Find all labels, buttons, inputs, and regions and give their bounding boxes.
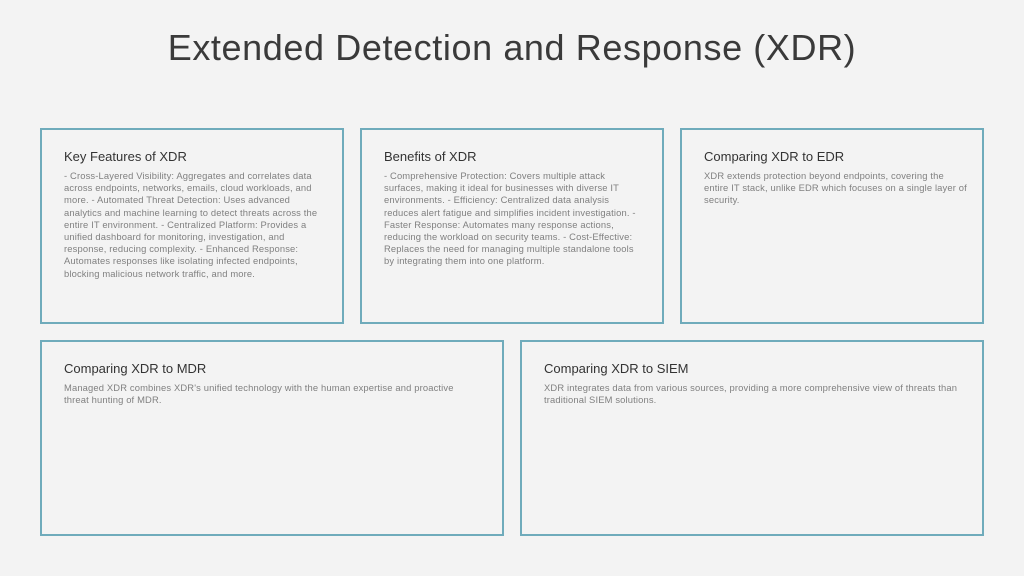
panel: XDR vs EDR: Comparing XDR to EDR <box>704 149 844 164</box>
panel: key features: - Cross-Layered Visibility: Aggregates and correlates data <box>64 170 312 181</box>
panel: benefits: reducing the workload on security teams. - Cost-Effective: <box>384 231 632 242</box>
panel: XDR vs SIEM: traditional SIEM solutions. <box>544 394 656 405</box>
panel: key features: more. - Automated Threat Detection: Uses advanced <box>64 194 290 205</box>
panel: benefits: Benefits of XDR <box>384 149 476 164</box>
panel: benefits: - Comprehensive Protection: Covers multiple attack <box>384 170 605 181</box>
panel: XDR vs MDR: threat hunting of MDR. <box>64 394 162 405</box>
panel: key features: response, reducing complexity. - Enhanced Response: <box>64 243 298 254</box>
panel: XDR vs SIEM <box>520 340 984 536</box>
panel: XDR vs EDR: XDR extends protection beyond endpoints, covering the <box>704 170 944 181</box>
panel: benefits: Faster Response: Automates many response actions, <box>384 219 614 230</box>
panel: XDR vs SIEM: XDR integrates data from various sources, providing a more comprehensive view of threats than <box>544 382 957 393</box>
panel: XDR vs SIEM: Comparing XDR to SIEM <box>544 361 688 376</box>
panel: XDR vs EDR <box>680 128 984 324</box>
panel: key features: across endpoints, networks, emails, cloud workloads, and <box>64 182 312 193</box>
panel: XDR vs MDR: Managed XDR combines XDR's unified technology with the human expertise and proactive <box>64 382 454 393</box>
panel: key features <box>40 128 344 324</box>
panel: benefits: Replaces the need for managing multiple standalone tools <box>384 243 634 254</box>
panel: benefits: by integrating them into one platform. <box>384 255 544 266</box>
panel: benefits: surfaces, making it ideal for businesses with diverse IT <box>384 182 619 193</box>
panel: key features: blocking malicious network traffic, and more. <box>64 268 255 279</box>
panel: benefits <box>360 128 664 324</box>
panel: XDR vs MDR <box>40 340 504 536</box>
title: Extended Detection and Response (XDR) <box>168 27 856 68</box>
panel: key features: entire IT environment. - Centralized Platform: Provides a <box>64 219 306 230</box>
panel: key features: analytics and machine learning to detect threats across the <box>64 207 317 218</box>
panel: key features: Automates responses like isolating infected endpoints, <box>64 255 298 266</box>
panel: XDR vs MDR: Comparing XDR to MDR <box>64 361 206 376</box>
panel: XDR vs EDR: security. <box>704 194 740 205</box>
panel: key features: unified dashboard for monitoring, investigation, and <box>64 231 284 242</box>
panel: benefits: reduces alert fatigue and simplifies incident investigation. - <box>384 207 636 218</box>
panel: benefits: environments. - Efficiency: Centralized data analysis <box>384 194 609 205</box>
panel: key features: Key Features of XDR <box>64 149 187 164</box>
panel: XDR vs EDR: entire IT stack, unlike EDR which focuses on a single layer of <box>704 182 967 193</box>
